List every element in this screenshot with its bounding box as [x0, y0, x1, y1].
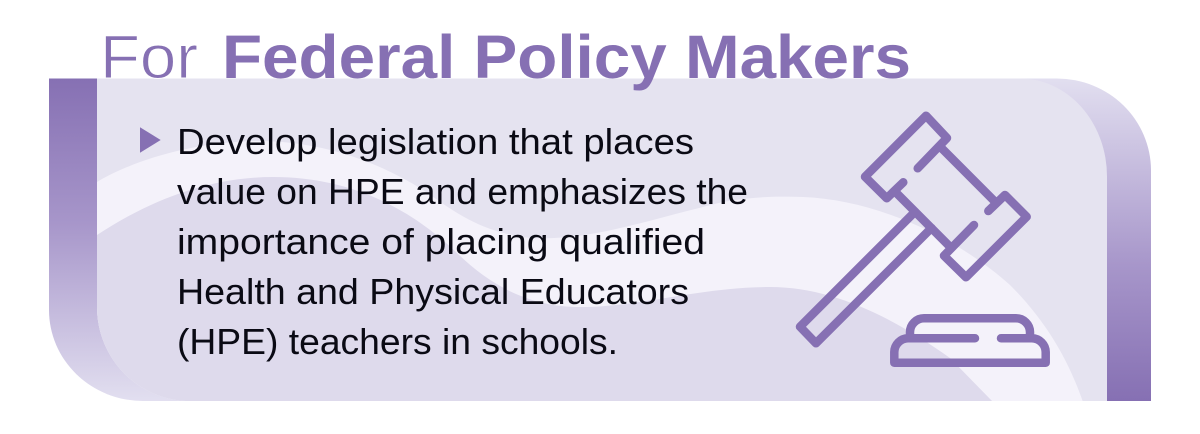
gavel head body [897, 148, 993, 247]
gavel handle [800, 212, 932, 343]
text block: recommendation: (HPE) teachers in schools. [177, 321, 618, 362]
panel: main lavender card with waves [97, 78, 1107, 402]
infographic canvas [49, 34, 1151, 401]
sound block [894, 318, 1046, 363]
gavel head lower cap [944, 195, 1027, 277]
panel: gradient backing shape [49, 78, 1151, 401]
title: For [100, 23, 198, 91]
text block: recommendation: value on HPE and emphasizes the [177, 171, 748, 212]
icon: gavel [800, 116, 1046, 363]
text block: recommendation: importance of placing qualified [177, 221, 705, 262]
text block: recommendation: Health and Physical Educators [177, 271, 689, 312]
icon: bullet triangle [140, 127, 161, 153]
text block: recommendation [177, 121, 748, 362]
title: Federal Policy Makers [222, 23, 911, 91]
text block: recommendation: Develop legislation that places [177, 121, 694, 162]
gavel head upper cap [865, 116, 947, 198]
